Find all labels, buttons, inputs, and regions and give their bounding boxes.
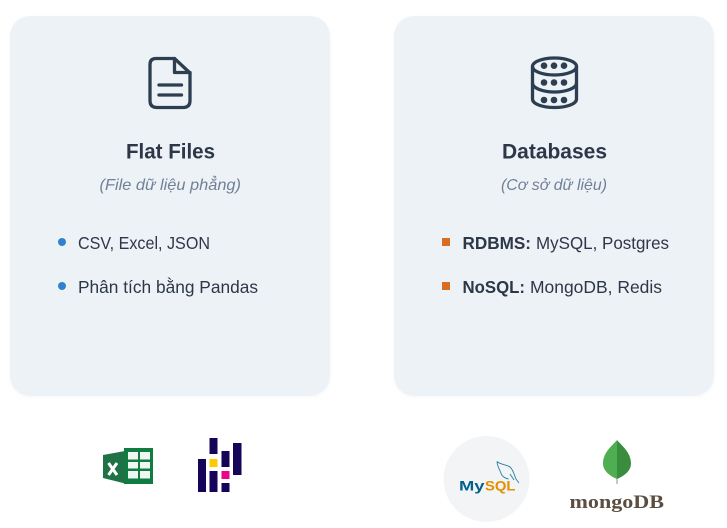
logo: MySQL xyxy=(444,436,530,522)
list item: CSV, Excel, JSON: CSV, Excel, JSON xyxy=(78,233,210,253)
list item: RDBMS: MySQL, Postgres xyxy=(536,233,669,253)
icon: database xyxy=(532,58,576,108)
wordmark: mongoDB xyxy=(570,492,664,513)
heading: Flat Files: Flat Files xyxy=(126,140,215,164)
list item: NoSQL xyxy=(442,277,662,297)
heading: Databases: Databases xyxy=(502,140,607,164)
list item: Pandas: Phân tích bằng Pandas xyxy=(78,276,258,297)
list item: NoSQL: NoSQL: xyxy=(462,277,525,297)
list item: RDBMS: RDBMS: xyxy=(462,233,531,253)
logo: MongoDB xyxy=(570,440,664,513)
dolphin xyxy=(497,462,519,483)
panel background xyxy=(394,16,714,396)
list item: NoSQL: MongoDB, Redis xyxy=(530,277,662,297)
logo: pandas xyxy=(198,438,242,492)
logo: Excel xyxy=(103,448,153,484)
panel: databases xyxy=(394,16,714,396)
leaf xyxy=(603,440,631,484)
wordmark: SQL xyxy=(485,478,516,494)
icon: file document xyxy=(150,58,190,108)
list item: RDBMS xyxy=(442,233,669,253)
wordmark xyxy=(459,478,516,494)
subtitle: File dữ liệu phẳng: (File dữ liệu phẳng) xyxy=(100,175,241,194)
panel: flat files xyxy=(10,16,330,396)
wordmark: My xyxy=(459,478,485,494)
panel background xyxy=(10,16,330,396)
subtitle: Cơ sở dữ liệu: (Cơ sở dữ liệu) xyxy=(501,177,607,194)
